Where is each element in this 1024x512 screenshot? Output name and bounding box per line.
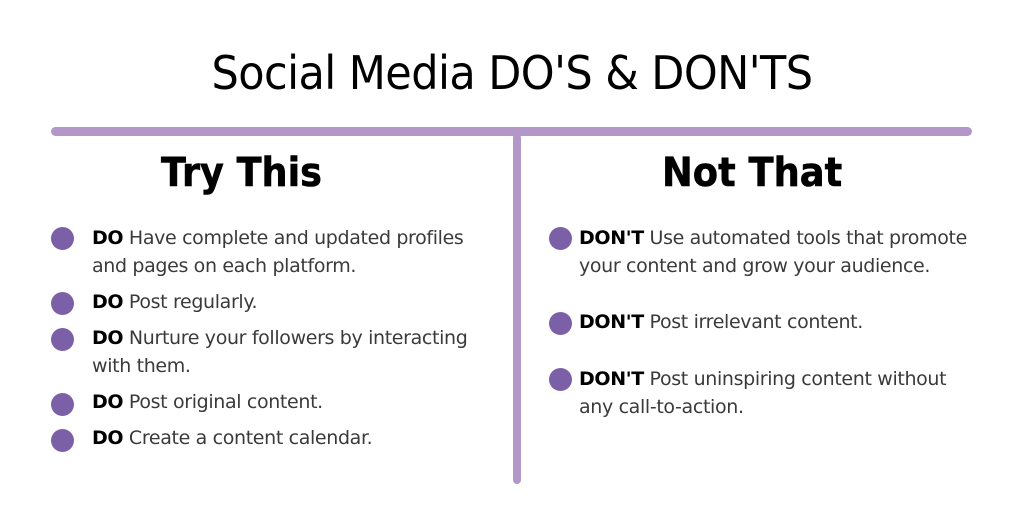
do item 1: DO Have complete and updated profiles <box>92 227 463 249</box>
don't item 1: DON'T Use automated tools that promote <box>579 227 967 249</box>
heading: try this: Try This <box>161 150 322 196</box>
bullet 1 <box>549 227 572 250</box>
don't item 1 <box>579 227 967 277</box>
don't item 2: DON'T Post irrelevant content. <box>579 311 863 333</box>
bullet 2 <box>51 292 74 315</box>
title: Social Media DO'S & DON'TS <box>211 46 812 100</box>
bullet 3 <box>51 328 74 351</box>
do item 5: DO Create a content calendar. <box>92 427 372 449</box>
bullet 1 <box>51 227 74 250</box>
bullet 4 <box>51 393 74 416</box>
do item 1: and pages on each platform. <box>92 255 356 277</box>
do item 3: with them. <box>92 355 191 377</box>
do item 3: DO Nurture your followers by interacting <box>92 327 467 349</box>
don't item 3: any call-to-action. <box>579 396 744 418</box>
do item 3 <box>92 327 467 377</box>
horizontal divider bar <box>51 127 972 136</box>
heading: not that: Not That <box>662 150 842 196</box>
bullet 2 <box>549 312 572 335</box>
don't item 1: your content and grow your audience. <box>579 255 930 277</box>
do item 1 <box>92 227 463 277</box>
do item 4: DO Post original content. <box>92 391 323 413</box>
bullet 5 <box>51 429 74 452</box>
bullet 3 <box>549 368 572 391</box>
do item 2: DO Post regularly. <box>92 291 257 313</box>
panel: do list <box>51 227 467 452</box>
don't item 3: DON'T Post uninspiring content without <box>579 368 946 390</box>
vertical divider bar <box>513 134 521 484</box>
don't item 3 <box>579 368 946 418</box>
panel: don't list <box>549 227 967 418</box>
